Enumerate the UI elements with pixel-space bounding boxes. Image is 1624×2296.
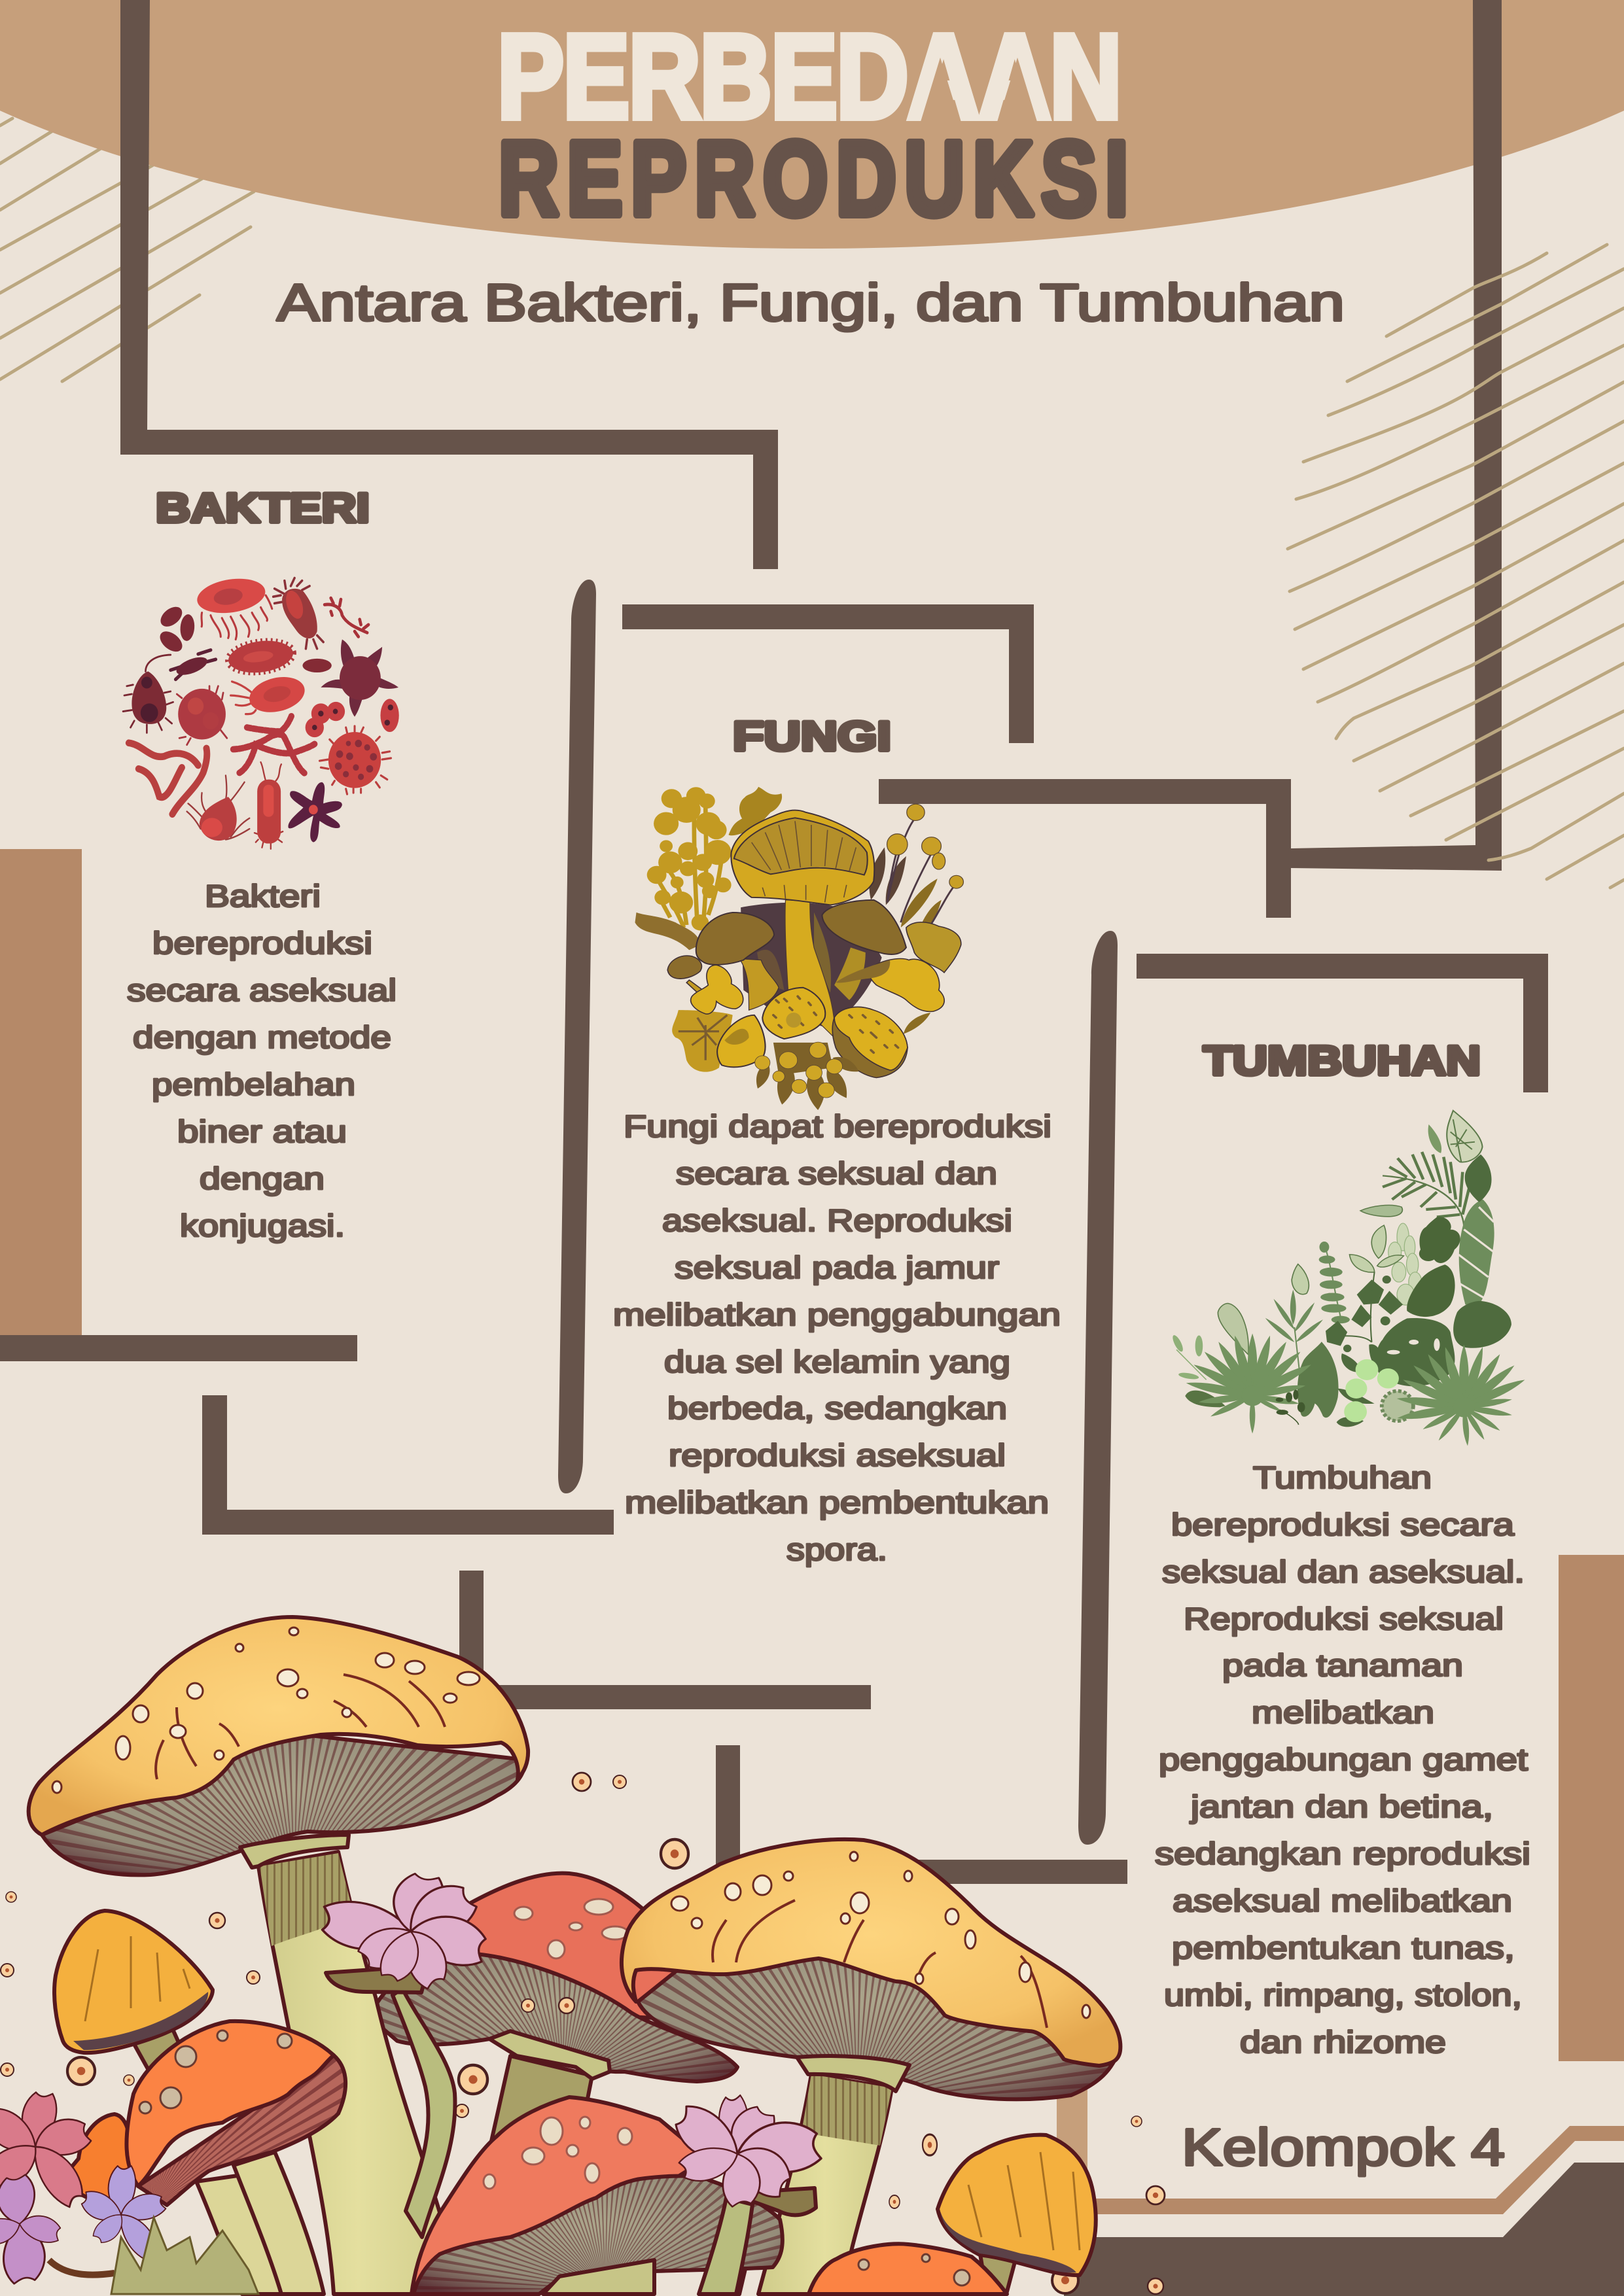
left small yellow mushroom stem	[134, 2026, 190, 2074]
heading: tumbuhan: TUMBUHAN	[1203, 1038, 1481, 1084]
text: fungi description: melibatkan penggabungan	[613, 1297, 1061, 1332]
bottom right disc	[832, 1007, 908, 1078]
second pink flower	[669, 2095, 822, 2208]
bottom collar	[543, 2260, 654, 2294]
flagellated oval	[231, 672, 308, 718]
text: tumbuhan description	[1155, 1460, 1530, 2059]
text: bakteri description: dengan	[200, 1161, 325, 1196]
text: tumbuhan description: pada tanaman	[1222, 1648, 1463, 1682]
left brown mushroom	[696, 913, 774, 965]
fern	[1319, 1242, 1350, 1323]
small outlined horizontal leaf	[1360, 1205, 1402, 1217]
right yellow flower	[868, 958, 944, 1011]
text: fungi description: reproduksi aseksual	[669, 1438, 1006, 1472]
text: bakteri description: dengan metode	[133, 1020, 391, 1054]
outlined striped leaf	[1218, 1304, 1248, 1355]
main cap	[731, 810, 874, 905]
left palm fan	[1185, 1333, 1313, 1434]
subtitle: Antara Bakteri, Fungi, dan Tumbuhan	[277, 273, 1345, 332]
clump cell	[177, 686, 227, 745]
copper block left	[0, 849, 82, 1335]
hairy rod	[274, 578, 323, 649]
flower stem right	[702, 2202, 759, 2294]
main stem	[785, 900, 835, 1037]
decorative hatching: top right	[1288, 245, 1624, 888]
text: fungi description: Fungi dapat bereproduksi	[624, 1109, 1051, 1143]
small yellow mushroom right stem	[980, 2250, 1015, 2294]
leaf over flower	[836, 960, 890, 983]
tailed cell	[123, 655, 173, 733]
text: tumbuhan description: seksual dan aseksual.	[1162, 1554, 1525, 1589]
spiny pear cell	[187, 776, 249, 841]
side dark leaf	[1369, 1344, 1381, 1365]
right brown mushroom	[822, 900, 906, 954]
spores	[1, 1773, 1165, 2294]
frame line: under bakteri	[0, 1335, 357, 1361]
frame line: fungi bracket	[622, 604, 1034, 743]
outlined trio of leaves	[1349, 1225, 1403, 1272]
text: fungi description: dua sel kelamin yang	[664, 1344, 1010, 1379]
leaf behind flowers	[1337, 1353, 1375, 1427]
big mushroom gills	[42, 1733, 524, 1884]
heading: bakteri: BAKTERI	[156, 485, 370, 531]
bottom red mushroom gills	[414, 2174, 785, 2296]
rod with tail	[255, 762, 283, 849]
icon: plants illustration	[1171, 1111, 1527, 1446]
right big mushroom cap	[622, 1839, 1120, 2066]
frame line: top left bracket	[120, 0, 778, 569]
text: tumbuhan description: jantan dan betina,	[1190, 1789, 1493, 1824]
right big mushroom gills	[637, 1960, 1116, 2101]
icon: fungi illustration	[635, 787, 963, 1111]
middle disc	[762, 988, 825, 1039]
decorative hatching: top left	[0, 118, 254, 381]
round leaf	[1453, 1301, 1511, 1348]
illustration: mushroom group	[0, 1617, 1165, 2294]
orchid	[1326, 1272, 1403, 1352]
frame line: behind big mushroom	[459, 1571, 871, 1709]
left disc	[717, 1015, 766, 1067]
flower stems and blossoms	[887, 804, 963, 925]
left brown mushroom stem	[739, 959, 779, 1010]
right pair	[380, 699, 399, 732]
right fern in centre	[814, 913, 831, 992]
rounded divider: right of fungi	[1078, 931, 1118, 1845]
text: tumbuhan description: Tumbuhan	[1253, 1460, 1432, 1495]
spotted sphere	[319, 726, 391, 794]
left ferns	[757, 950, 784, 990]
text: tumbuhan description: penggabungan gamet	[1159, 1742, 1528, 1777]
jellyfish bacterium	[195, 574, 272, 639]
text: tumbuhan description: aseksual melibatkan	[1173, 1883, 1512, 1918]
right palm fan	[1396, 1345, 1527, 1446]
striped banana leaf	[1457, 1200, 1494, 1304]
small oval	[302, 659, 332, 672]
title: REPRODUKSI	[499, 120, 1137, 237]
amoeba	[288, 782, 342, 843]
dark big leaf	[1465, 1155, 1492, 1202]
flower base	[326, 1966, 429, 1992]
pale leaves	[1388, 1223, 1422, 1305]
right stem shading	[802, 2074, 892, 2146]
header arc	[0, 0, 1624, 249]
text: tumbuhan description: sedangkan reproduksi	[1155, 1836, 1530, 1871]
text: fungi description: spora.	[786, 1532, 887, 1567]
bamboo sprig	[1263, 1289, 1324, 1375]
second flower base	[730, 2188, 816, 2215]
top right funnel	[906, 922, 961, 973]
icon: bacteria collection	[123, 574, 399, 849]
second flower stem	[699, 2198, 752, 2294]
text: group name: Kelompok 4	[1182, 2118, 1505, 2176]
text: fungi description: seksual pada jamur	[675, 1250, 999, 1285]
big mushroom collar	[240, 1835, 349, 1868]
sprigs	[647, 787, 732, 930]
oak leaf	[728, 787, 782, 835]
small leaves far left	[1171, 1334, 1207, 1380]
flower stem	[393, 1989, 455, 2237]
text: fungi description: aseksual. Reproduksi	[662, 1203, 1012, 1238]
text: tumbuhan description: Reproduksi seksual	[1184, 1601, 1504, 1636]
text: fungi description: berbeda, sedangkan	[667, 1391, 1007, 1425]
outlined top leaf	[1447, 1111, 1483, 1162]
star cell	[321, 639, 398, 717]
hibiscus	[1419, 1217, 1460, 1263]
text: fungi description: secara seksual dan	[676, 1156, 997, 1191]
frame line: lower bracket	[202, 1395, 614, 1535]
right ferns	[869, 847, 942, 1034]
copper block right	[1559, 1555, 1624, 2061]
small yellow mushroom right	[938, 2135, 1096, 2275]
frame line: top right bracket	[1291, 0, 1502, 871]
left leaf veined	[672, 1010, 733, 1072]
text: tumbuhan description: umbi, rimpang, stolon,	[1164, 1977, 1522, 2012]
left flowers	[0, 2091, 115, 2285]
text: tumbuhan description: dan rhizome	[1240, 2025, 1446, 2059]
right brown mushroom stem	[834, 948, 866, 1000]
text: tumbuhan description: melibatkan	[1252, 1695, 1434, 1730]
footer copper stripe	[1073, 2126, 1624, 2214]
orange mushroom gills	[136, 2053, 348, 2207]
purple flower	[79, 2166, 168, 2263]
worm bacterium	[325, 598, 368, 636]
pink flower	[321, 1871, 488, 1992]
lace leaf	[1382, 1391, 1413, 1421]
mini mushroom	[667, 956, 703, 992]
text: bakteri description: Bakteri	[205, 878, 321, 913]
outlined small leaf	[1292, 1264, 1309, 1295]
text: tumbuhan description: pembentukan tunas,	[1172, 1930, 1515, 1965]
bottom leaf cluster	[752, 1042, 862, 1111]
text: bakteri description: bereproduksi	[152, 926, 372, 960]
long chain worms	[129, 743, 207, 814]
big mushroom stem	[258, 1852, 458, 2294]
frame line: tumbuhan bracket	[1137, 954, 1548, 1092]
text: tumbuhan description: bereproduksi secara	[1171, 1507, 1515, 1542]
back small stems	[196, 2152, 324, 2294]
spiky oval	[227, 637, 294, 676]
small dark sprig	[1276, 1390, 1305, 1425]
text: bakteri description: konjugasi.	[180, 1208, 345, 1243]
footer tan block	[1057, 2086, 1087, 2204]
text: fungi description	[613, 1109, 1061, 1567]
curved palm frond	[1383, 1152, 1470, 1226]
title	[497, 9, 1137, 237]
text: bakteri description: biner atau	[177, 1114, 347, 1149]
right big mushroom stem	[758, 2074, 892, 2294]
triple cells	[156, 603, 196, 655]
arrow leaf	[1297, 1342, 1339, 1418]
light flowers	[1344, 1359, 1399, 1422]
title: PERBEDAAN	[497, 9, 1121, 143]
text: bakteri description: secara aseksual	[127, 973, 397, 1007]
frame line: behind right mushroom	[716, 1745, 1127, 1884]
small bug	[171, 650, 216, 680]
left brown leaf	[635, 913, 700, 950]
left yellow flower	[691, 965, 743, 1014]
right big mushroom collar	[797, 2056, 909, 2091]
text: fungi description: melibatkan pembentukan	[625, 1485, 1049, 1520]
monstera	[1376, 1318, 1455, 1386]
left small yellow mushroom	[54, 1911, 213, 2053]
grass	[111, 2218, 258, 2294]
rose bloom	[1407, 1264, 1455, 1317]
text: bakteri description	[127, 878, 397, 1243]
small orange mushroom bottom	[809, 2244, 1007, 2294]
chain bacteria	[233, 714, 315, 774]
back small orange mushroom	[62, 2114, 132, 2211]
diplococcus	[306, 702, 345, 737]
bottom red mushroom cap	[412, 2097, 707, 2294]
lower left leaf	[1185, 1391, 1226, 1407]
small feather leaf	[1428, 1124, 1441, 1153]
rounded divider: left of fungi	[558, 580, 596, 1493]
back red mushroom	[369, 1873, 737, 2159]
big mushroom cap	[29, 1617, 528, 1835]
heading: fungi: FUNGI	[733, 714, 891, 759]
dark centre	[741, 903, 882, 1028]
frame line: fungi to tumbuhan connector	[879, 779, 1291, 918]
text: bakteri description: pembelahan	[152, 1067, 355, 1102]
footer dark band	[1064, 2163, 1624, 2296]
orange mushroom cap	[126, 2021, 334, 2186]
